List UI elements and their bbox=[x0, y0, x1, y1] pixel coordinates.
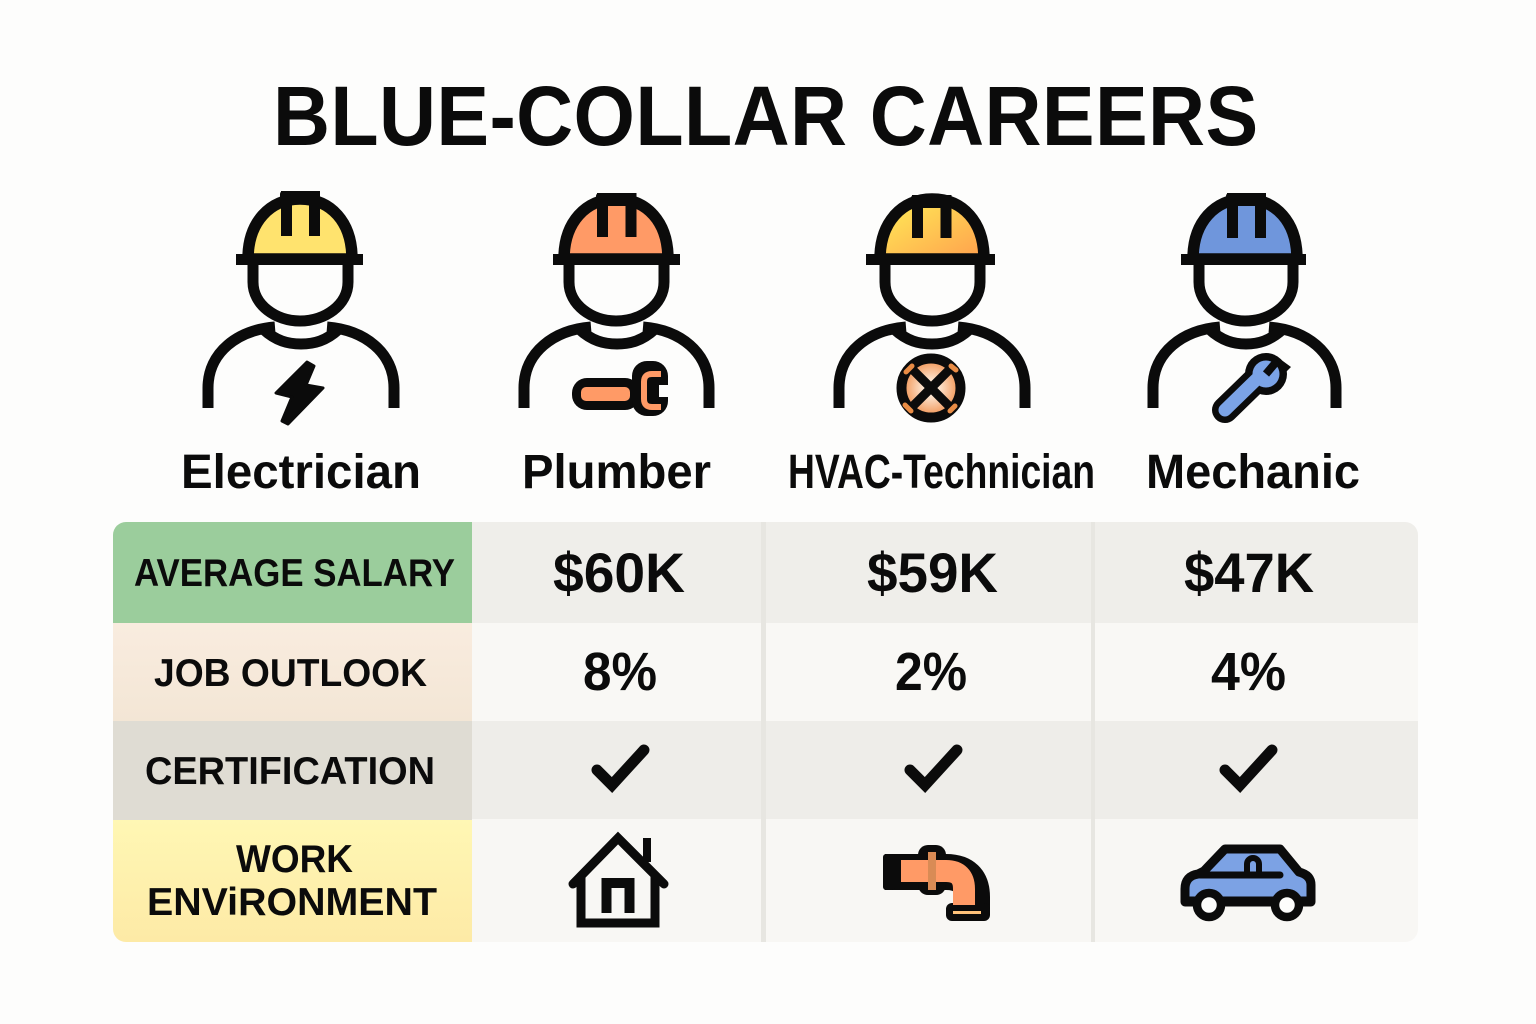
worker: mechanic bbox=[1153, 193, 1336, 410]
icon: check mark bbox=[597, 750, 644, 785]
row: job outlook: 8% bbox=[583, 642, 657, 702]
label: Electrician: Electrician bbox=[181, 446, 421, 499]
worker outline bbox=[208, 262, 394, 408]
worker outline bbox=[524, 262, 709, 408]
icon: car bbox=[1184, 849, 1312, 917]
row: average salary: AVERAGE SALARY bbox=[134, 552, 455, 595]
icon: amber hard hat bbox=[866, 195, 995, 265]
row: average salary: $59K bbox=[867, 541, 998, 604]
row: certification bbox=[145, 750, 1272, 793]
row: average salary: $47K bbox=[1184, 541, 1314, 604]
icon: check mark bbox=[910, 750, 957, 785]
worker: electrician bbox=[208, 191, 394, 424]
row: work environment: ENViRONMENT bbox=[147, 881, 437, 924]
icon: pipe bbox=[883, 845, 990, 921]
row: job outlook bbox=[154, 642, 1286, 702]
icon: house bbox=[573, 838, 664, 923]
icon: lightning bolt bbox=[276, 362, 323, 424]
row: work environment: WORK bbox=[236, 838, 353, 881]
icon: hvac fan bbox=[902, 358, 960, 418]
row: job outlook: JOB OUTLOOK bbox=[154, 652, 427, 695]
worker: plumber bbox=[524, 193, 709, 416]
label: HVAC-Technician: HVAC-Technician bbox=[788, 446, 1095, 499]
row: average salary bbox=[134, 541, 1314, 604]
icon: orange wrench bbox=[572, 361, 669, 416]
worker: hvac technician bbox=[839, 195, 1025, 418]
icon: check mark bbox=[1225, 750, 1272, 785]
row: average salary: $60K bbox=[553, 541, 685, 604]
label: Plumber: Plumber bbox=[522, 446, 711, 499]
icon: orange hard hat bbox=[553, 193, 680, 265]
comparison table bbox=[113, 522, 1418, 942]
row: certification: CERTIFICATION bbox=[145, 750, 435, 793]
row: work environment bbox=[147, 838, 1312, 924]
row: job outlook: 4% bbox=[1211, 642, 1286, 702]
table backgrounds bbox=[113, 522, 1418, 942]
icon: yellow hard hat bbox=[236, 191, 363, 265]
worker outline bbox=[839, 262, 1025, 408]
label: Mechanic: Mechanic bbox=[1146, 446, 1360, 499]
icon: blue wrench bbox=[1225, 353, 1291, 410]
worker outline bbox=[1153, 262, 1336, 408]
icon: blue hard hat bbox=[1181, 193, 1306, 265]
row: job outlook: 2% bbox=[895, 642, 967, 702]
title: BLUE-COLLAR CAREERS bbox=[273, 70, 1258, 164]
